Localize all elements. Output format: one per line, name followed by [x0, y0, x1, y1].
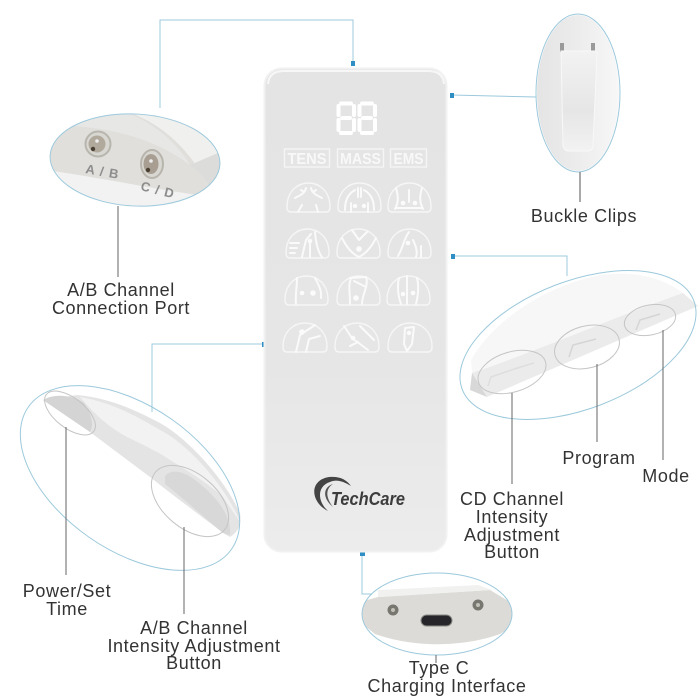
- mode labels: TENS: [288, 151, 327, 168]
- label: A/B Channel Intensity Adjustment Button: A/B Channel: [140, 618, 248, 638]
- label: Buckle Clips: Buckle Clips: [531, 206, 637, 226]
- leader: CD channel button: [511, 393, 513, 484]
- callout: right side buttons: [439, 241, 700, 449]
- body program icons: [283, 183, 432, 352]
- label: A/B Channel Intensity Adjustment Button: Intensity Adjustment: [107, 636, 281, 656]
- leader: power/set time: [65, 427, 67, 575]
- USB-C socket: [421, 615, 452, 626]
- label: Mode: Mode: [642, 466, 690, 486]
- leader: A/B intensity: [183, 527, 185, 614]
- callout: A/B ports: A / B: [84, 161, 121, 182]
- label: A/B Channel Intensity Adjustment Button: Button: [166, 653, 222, 673]
- connector: device to Type C: [360, 551, 376, 594]
- mode labels: MASS: [340, 151, 381, 168]
- label: Type C Charging Interface: Charging Interface: [368, 676, 526, 696]
- label: Power/Set Time: Power/Set: [23, 581, 111, 601]
- button: program: [550, 319, 624, 375]
- label: Program: Program: [562, 448, 636, 468]
- label: A/B Channel Connection Port: Connection Port: [52, 298, 190, 318]
- leader: buckle clips: [579, 172, 581, 202]
- label: A/B Channel Connection Port: A/B Channel: [67, 280, 175, 300]
- callout: A/B ports: [50, 113, 220, 207]
- TechCare logo: TechCare: [331, 489, 405, 509]
- TechCare logo: [314, 477, 405, 511]
- leader: mode button: [662, 330, 664, 460]
- leader: Type C: [435, 655, 437, 663]
- leader: A/B port: [117, 206, 119, 277]
- mode labels: [284, 149, 426, 168]
- callout: buckle clips: [535, 14, 621, 174]
- port A/B: [86, 132, 110, 156]
- label: CD Channel Intensity Adjustment Button: Intensity: [476, 507, 548, 527]
- connector: device to buckle clips: [450, 93, 536, 98]
- device body: [264, 68, 446, 552]
- callout: A/B ports: C / D: [139, 178, 176, 201]
- port C/D: [141, 150, 163, 178]
- callout: left side buttons: [0, 348, 273, 608]
- connector: device top to A/B port: [160, 20, 355, 108]
- callout: Type C port: [360, 573, 515, 657]
- label: CD Channel Intensity Adjustment Button: CD Channel: [460, 489, 564, 509]
- mode labels: EMS: [394, 151, 424, 168]
- label: Type C Charging Interface: Type C: [409, 658, 469, 678]
- button: CD channel: [473, 343, 551, 401]
- label: CD Channel Intensity Adjustment Button: Button: [484, 542, 540, 562]
- button: mode: [621, 300, 679, 340]
- button: power: [37, 383, 103, 443]
- icon row 2: [286, 229, 431, 258]
- screw left: [388, 604, 398, 616]
- button: A/B channel: [138, 451, 242, 551]
- digital display: [338, 104, 375, 133]
- label: Power/Set Time: Time: [46, 599, 88, 619]
- icon row 4: [283, 323, 432, 352]
- icon row 3: [285, 276, 430, 305]
- connector: device to left side buttons: [152, 342, 266, 412]
- connector: device to side buttons: [451, 254, 567, 276]
- label: CD Channel Intensity Adjustment Button: Adjustment: [464, 525, 560, 545]
- leader: program button: [596, 364, 598, 442]
- icon row 1: [287, 183, 431, 212]
- screw right: [472, 600, 484, 610]
